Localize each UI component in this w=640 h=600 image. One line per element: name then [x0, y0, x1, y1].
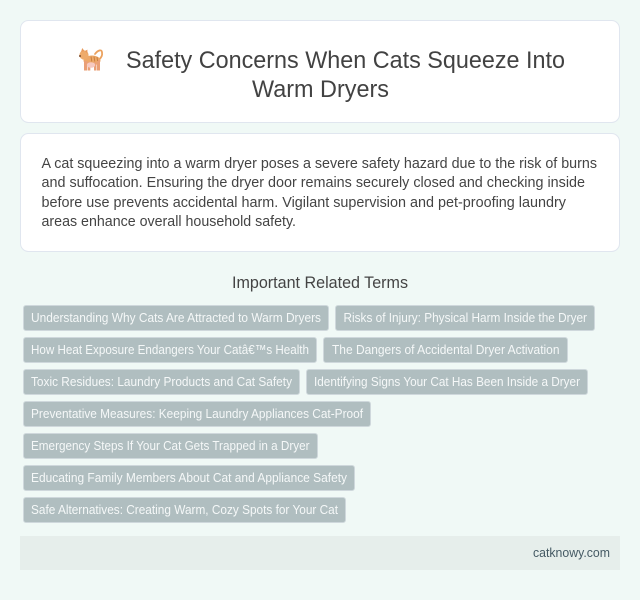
text block: description: and suffocation. Ensuring the dryer door remains securely closed and checking inside	[42, 174, 585, 191]
tag: emergency steps: Emergency Steps If Your Cat Gets Trapped in a Dryer	[31, 438, 310, 453]
title	[126, 47, 565, 103]
tag: risks of injury	[336, 306, 594, 330]
tag: heat exposure: How Heat Exposure Endangers Your Catâ€™s Health	[31, 342, 309, 357]
text block: description: A cat squeezing into a warm dryer poses a severe safety hazard due to the risk of burns	[42, 155, 597, 172]
title: Warm Dryers	[252, 76, 389, 103]
tag: preventative measures: Preventative Measures: Keeping Laundry Appliances Cat-Proof	[31, 406, 363, 421]
tag: educating family: Educating Family Members About Cat and Appliance Safety	[31, 470, 347, 485]
icon: cat	[79, 48, 102, 70]
title: Safety Concerns When Cats Squeeze Into	[126, 47, 565, 74]
footer	[20, 536, 620, 570]
footer credit: catknowy.com	[533, 545, 610, 560]
tag: toxic residues	[24, 370, 300, 394]
heading: related terms: Important Related Terms	[232, 273, 408, 292]
tag: identifying signs	[306, 370, 588, 394]
text block: description: areas enhance overall household safety.	[42, 213, 296, 230]
tag: safe alternatives	[24, 498, 346, 522]
tag: safe alternatives: Safe Alternatives: Creating Warm, Cozy Spots for Your Cat	[31, 502, 338, 517]
tag: risks of injury: Risks of Injury: Physical Harm Inside the Dryer	[344, 310, 588, 325]
tag: emergency steps	[24, 434, 318, 458]
tag: preventative measures	[24, 402, 370, 426]
tag: accidental activation	[324, 338, 568, 362]
tag: why cats are attracted	[24, 306, 328, 330]
tag: educating family	[24, 466, 354, 490]
tag: accidental activation: The Dangers of Accidental Dryer Activation	[332, 342, 560, 357]
text block: description: before use prevents accidental harm. Vigilant supervision and pet-proofing laundry	[42, 194, 566, 211]
tag: identifying signs: Identifying Signs Your Cat Has Been Inside a Dryer	[314, 374, 581, 389]
tag: toxic residues: Toxic Residues: Laundry Products and Cat Safety	[31, 374, 292, 389]
panel: related term tags	[24, 306, 594, 522]
panel: title card	[20, 20, 620, 122]
panel: description	[20, 134, 620, 252]
tag: heat exposure	[24, 338, 316, 362]
tag: why cats are attracted: Understanding Why Cats Are Attracted to Warm Dryers	[31, 310, 321, 325]
text block: description	[42, 155, 597, 230]
